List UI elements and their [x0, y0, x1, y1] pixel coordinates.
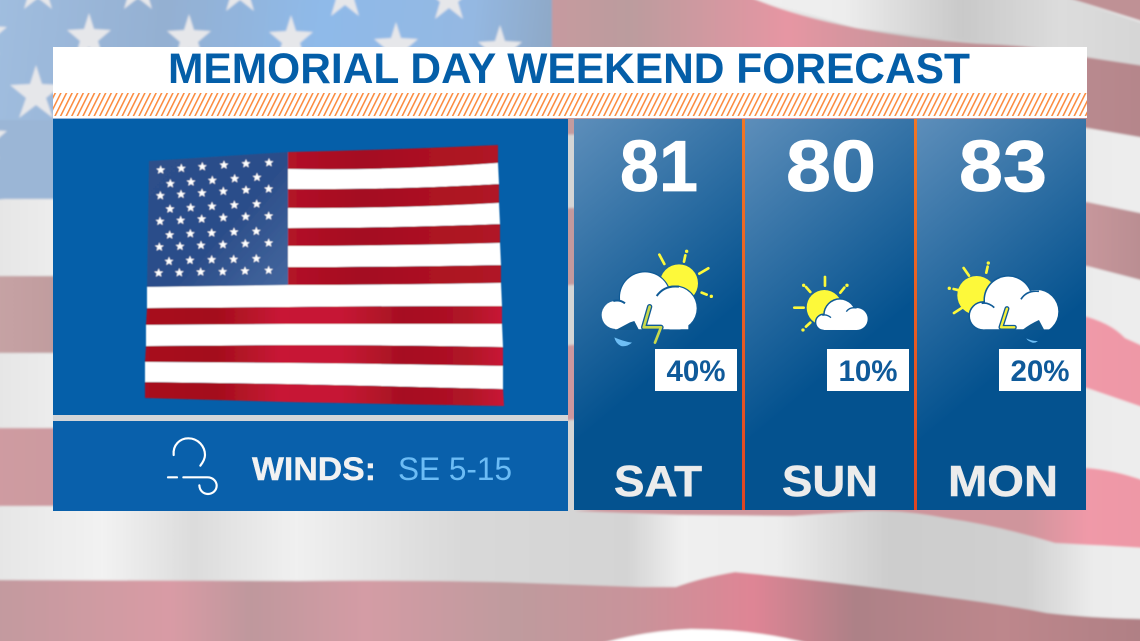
icon: wind: [168, 438, 217, 494]
winds label: WINDS:: [252, 451, 376, 487]
precip chance: Sunday: [827, 349, 909, 391]
winds value: SE 5-15: [398, 451, 512, 487]
icon: sun, storm cloud and rain: [602, 250, 713, 346]
day label: Saturday: SAT: [614, 457, 702, 506]
temperature: Sunday: 80: [786, 127, 876, 207]
precip chance: Sunday: 10%: [838, 355, 898, 388]
icon: American flag: [145, 145, 504, 406]
temperature: Monday: 83: [959, 127, 1047, 207]
precip chance: Monday: 20%: [1010, 355, 1070, 388]
day label: Monday: MON: [948, 457, 1058, 506]
icon: sun and small cloud: [794, 277, 868, 332]
day label: Sunday: SUN: [782, 457, 878, 506]
precip chance: Saturday: [655, 349, 737, 391]
precip chance: Monday: [999, 349, 1081, 391]
header bar: [53, 46, 1087, 118]
panel: Sunday: [745, 119, 914, 510]
icon: sun, storm cloud and rain: [948, 261, 1058, 343]
temperature: Saturday: 81: [620, 127, 698, 207]
precip chance: Saturday: 40%: [666, 355, 726, 388]
orange hatch band: [53, 93, 1087, 116]
panel: flag illustration: [53, 119, 568, 415]
panel: Monday: [917, 119, 1086, 510]
panel: winds: [53, 421, 568, 511]
title: MEMORIAL DAY WEEKEND FORECAST: [168, 46, 970, 93]
panel: Saturday: [574, 119, 742, 510]
